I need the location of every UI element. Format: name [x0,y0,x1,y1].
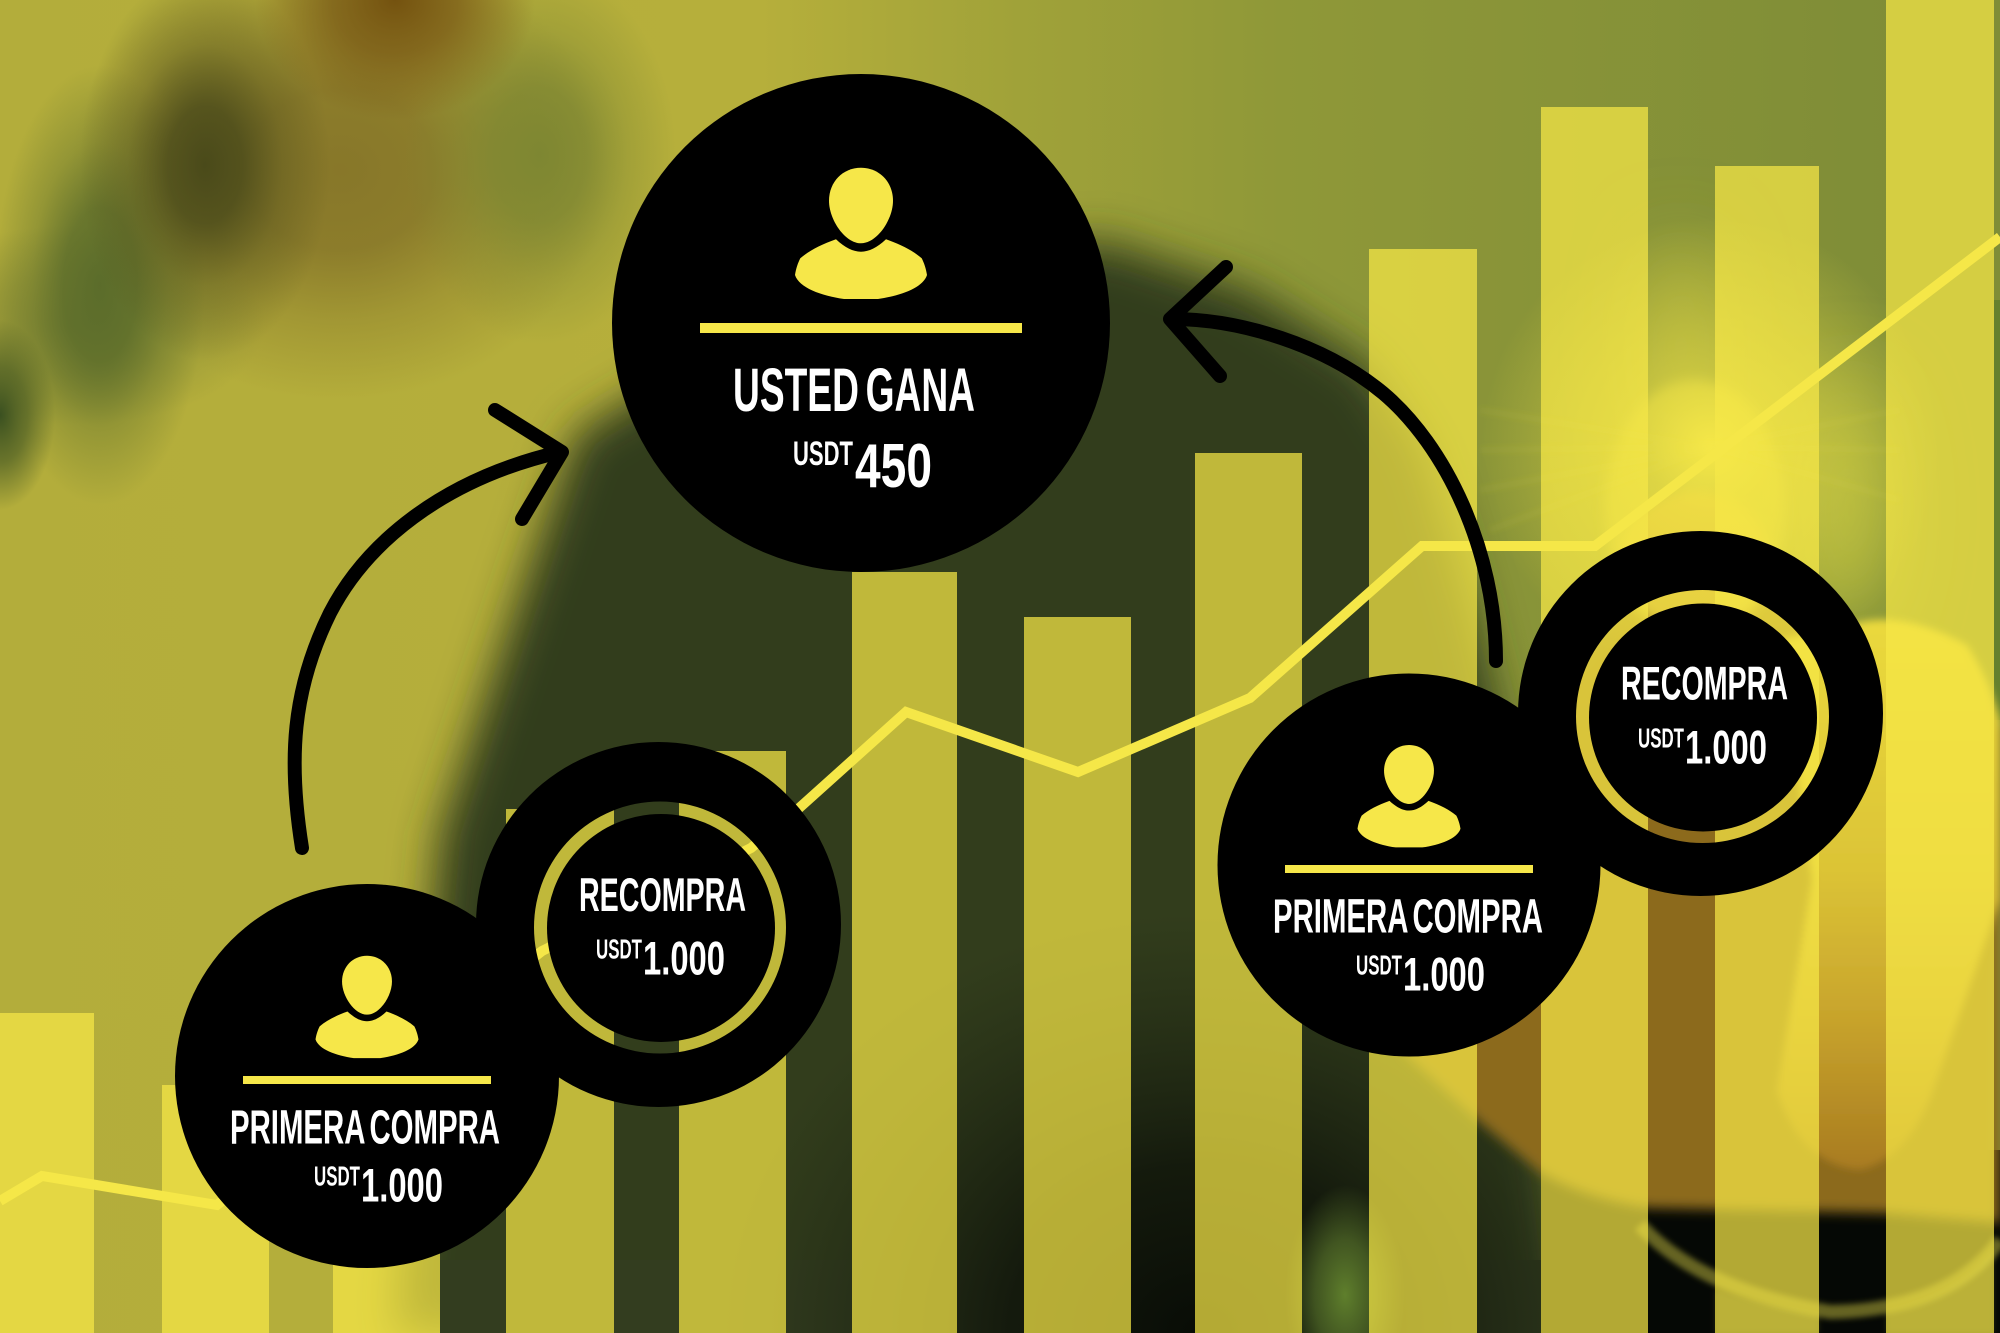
amount: 1.000 [643,932,725,985]
icon: person [795,168,927,299]
amount: 1.000 [1685,721,1767,774]
panel: primera compra right [1218,674,1600,1056]
panel: primera compra left [175,884,559,1268]
icon: person [1358,745,1460,847]
heading: RECOMPRA [1621,657,1788,710]
finger glow [1605,380,1785,640]
currency label: USDT [314,1160,360,1191]
arrow: left, up to main circle [295,410,562,848]
amount: 1.000 [1403,947,1485,1000]
amount: 450 [855,432,932,501]
currency label: USDT [793,435,853,473]
arrow: right, back to main circle [1170,267,1496,661]
panel: recompra right [1518,531,1883,896]
heading: PRIMERA COMPRA [1273,890,1543,944]
lighter bar area below the hand arc [1715,1247,1994,1333]
currency label: USDT [596,934,642,965]
icon: person [316,956,418,1058]
currency label: USDT [1356,949,1402,980]
hand [1300,490,2000,1333]
light flare [1480,217,1941,677]
panel: recompra left [476,742,841,1107]
heading: PRIMERA COMPRA [230,1102,500,1155]
panel: usted gana [612,74,1110,572]
heading: USTED GANA [733,356,975,424]
trend line [0,237,2000,1205]
currency label: USDT [1638,722,1684,754]
heading: RECOMPRA [579,868,746,921]
amount: 1.000 [361,1158,443,1211]
